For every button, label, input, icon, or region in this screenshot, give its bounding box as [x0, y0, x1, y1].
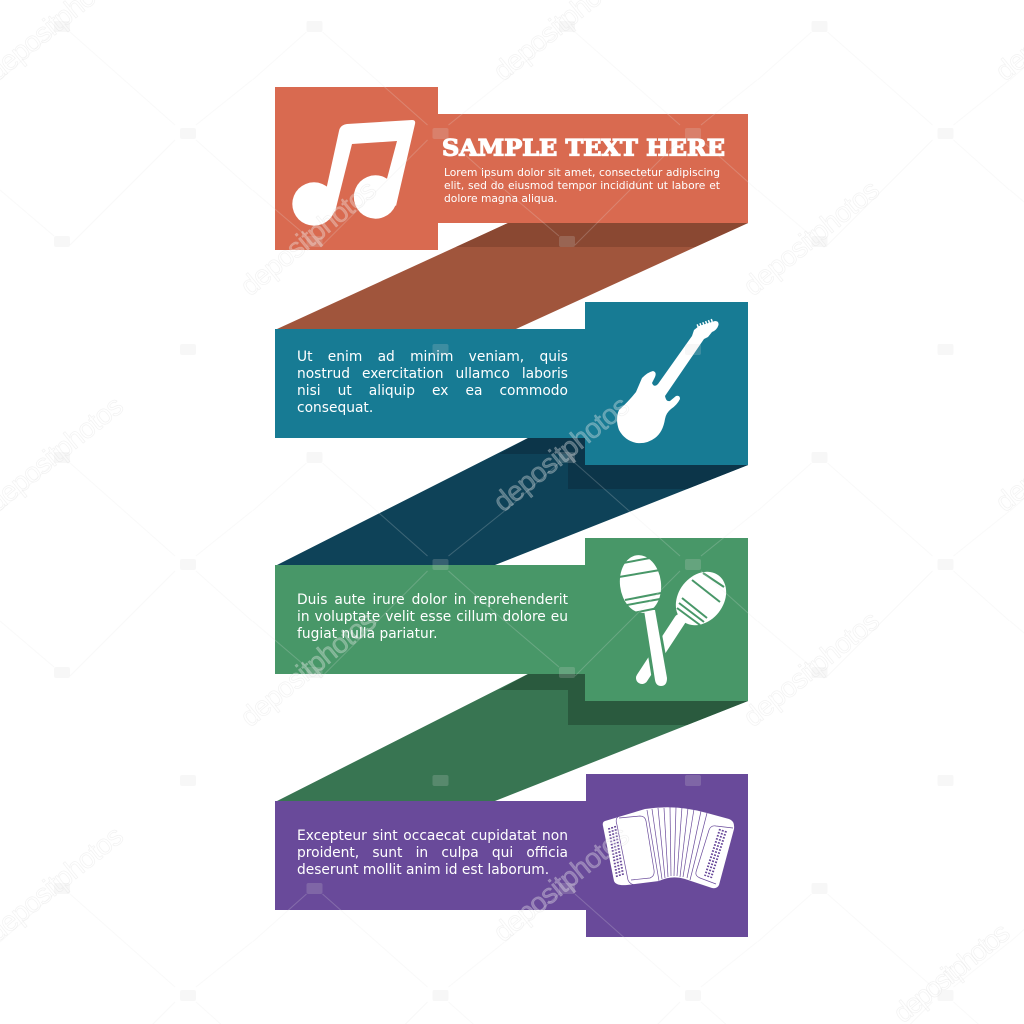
panel shape: green — [275, 538, 748, 701]
watermark overlay: depositphotos — [487, 390, 635, 518]
text block: ut enim — [297, 349, 568, 416]
heading: SAMPLE TEXT HERE — [442, 136, 725, 162]
panel shape: coral — [275, 87, 748, 250]
watermark overlay: depositphotos — [234, 174, 382, 302]
text block: ut enim: consequat. — [297, 400, 373, 416]
icon: music note — [292, 120, 416, 226]
watermark overlay: depositphotos — [737, 605, 885, 733]
panel shape: purple — [275, 774, 748, 937]
text block: lorem ipsum: Lorem ipsum dolor sit amet, consectetur adipiscing — [444, 166, 720, 179]
text block: excepteur: deserunt mollit anim id est laborum. — [297, 862, 549, 878]
text block: excepteur: proident, sunt in culpa qui officia — [297, 845, 568, 861]
panel: green maracas band — [275, 538, 748, 701]
text block: excepteur: Excepteur sint occaecat cupidatat non — [297, 828, 568, 844]
text block: duis aute — [297, 592, 568, 642]
text block: duis aute: fugiat nulla pariatur. — [297, 626, 438, 642]
text block: ut enim: nisi ut aliquip ex ea commodo — [297, 383, 568, 399]
panel: teal guitar band — [275, 302, 748, 465]
text block: excepteur — [297, 828, 568, 878]
panel shape: teal — [275, 302, 748, 465]
watermark overlay: depositphotos — [487, 820, 635, 948]
text block: duis aute: Duis aute irure dolor in reprehenderit — [297, 592, 568, 608]
text block: lorem ipsum: dolore magna aliqua. — [444, 192, 557, 205]
icon: electric guitar — [617, 318, 719, 444]
text block: duis aute: in voluptate velit esse cillum dolore eu — [297, 609, 568, 625]
text block: lorem ipsum — [444, 166, 720, 205]
icon: maracas — [620, 555, 726, 686]
watermark overlay: depositphotos — [737, 174, 885, 302]
text block: ut enim: nostrud exercitation ullamco laboris — [297, 366, 568, 382]
icon: accordion — [602, 807, 734, 888]
panel: purple accordion band — [275, 774, 748, 937]
text block: ut enim: Ut enim ad minim veniam, quis — [297, 349, 568, 365]
panel: coral heading band — [275, 87, 748, 250]
watermark overlay: depositphotos — [234, 605, 382, 733]
text block: lorem ipsum: elit, sed do eiusmod tempor incididunt ut labore et — [444, 179, 720, 192]
